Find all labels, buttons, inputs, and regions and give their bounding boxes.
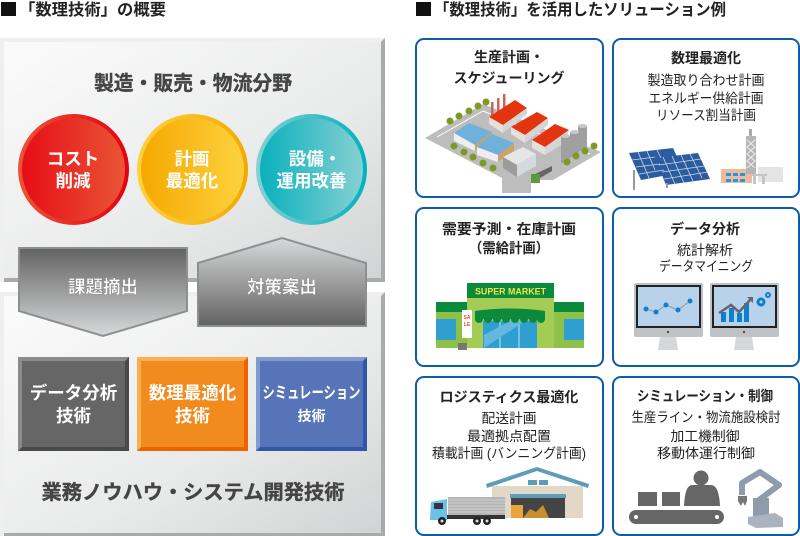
arrow: problem extraction [19,248,187,336]
arrow: countermeasure [198,238,366,326]
box: optimisation technology: 技術 [175,406,210,426]
icon: solar panels and plant [629,129,783,190]
circle: cost reduction: コスト [47,149,99,169]
panel: production scheduling [416,39,603,197]
icon: robot arm [738,472,783,528]
panel: logistics optimisation: 積載計画 (バンニング計画) [432,446,586,461]
panel: technology base [0,292,385,536]
panel: data analysis: 統計解析 [677,243,733,258]
panel: data analysis [613,208,799,366]
panel: mathematical optimisation [613,39,799,197]
box: data analysis technology: 技術 [56,406,91,426]
heading: solutions: 「数理技術」を活用したソリューション例 [434,0,726,19]
panel: mathematical optimisation: エネルギー供給計画 [648,91,764,106]
panel: production scheduling: スケジューリング [453,70,565,86]
icon: warehouse and truck [430,467,589,524]
panel: data analysis: データ分析 [670,221,740,237]
icon: conveyor worker [629,470,724,524]
circle: plan optimisation: 最適化 [166,171,219,191]
icon: monitors with charts [634,283,779,350]
panel: simulation and control: 移動体運行制御 [657,446,755,461]
box: simulation technology [256,357,367,451]
icon: supermarket: LE [464,322,471,328]
panel: manufacturing field [0,38,385,282]
panel: data analysis: データマイニング [659,258,753,274]
circle: equipment improvement [256,114,367,225]
panel: mathematical optimisation: リソース割当計画 [656,108,756,123]
panel: logistics optimisation [416,377,603,535]
box: optimisation technology [137,357,248,451]
panel: demand forecast: 需要予測・在庫計画 [442,221,576,237]
panel: logistics optimisation: 最適拠点配置 [467,429,551,444]
panel: simulation and control: 生産ライン・物流施設検討 [632,410,780,425]
box: optimisation technology: 数理最適化 [149,383,237,403]
circle: cost reduction [18,114,129,225]
panel: logistics optimisation: 配送計画 [482,411,536,426]
circle: plan optimisation [137,114,248,225]
panel: logistics optimisation: ロジスティクス最適化 [440,389,578,405]
circle: equipment improvement: 設備・ [289,149,341,169]
box: simulation technology: 技術 [298,408,326,424]
panel: mathematical optimisation: 数理最適化 [671,50,741,66]
box: data analysis technology [18,357,129,451]
box: data analysis technology: データ分析 [30,383,117,403]
box: simulation technology: シミュレーション [262,385,360,402]
panel: production scheduling: 生産計画・ [474,49,544,65]
heading: overview: 「数理技術」の概要 [19,0,166,19]
panel: simulation and control: 加工機制御 [670,429,740,444]
icon: supermarket [436,283,584,350]
icon: supermarket: SA [464,315,471,321]
icon: factory site [425,94,601,193]
arrow: countermeasure: 対策案出 [247,277,317,297]
panel: mathematical optimisation: 製造取り合わせ計画 [648,73,764,88]
heading: know-how: 業務ノウハウ・システム開発技術 [42,480,344,504]
arrow: problem extraction: 課題摘出 [68,277,138,297]
panel: simulation and control: シミュレーション・制御 [637,388,773,404]
icon: supermarket: SUPER MARKET [475,286,546,298]
panel: demand forecast [416,208,603,366]
circle: cost reduction: 削減 [56,171,91,191]
panel: demand forecast: （需給計画） [469,240,549,256]
panel: simulation and control [613,377,799,535]
circle: equipment improvement: 運用改善 [276,171,346,191]
circle: plan optimisation: 計画 [174,149,210,169]
heading: field: 製造・販売・物流分野 [94,72,292,95]
